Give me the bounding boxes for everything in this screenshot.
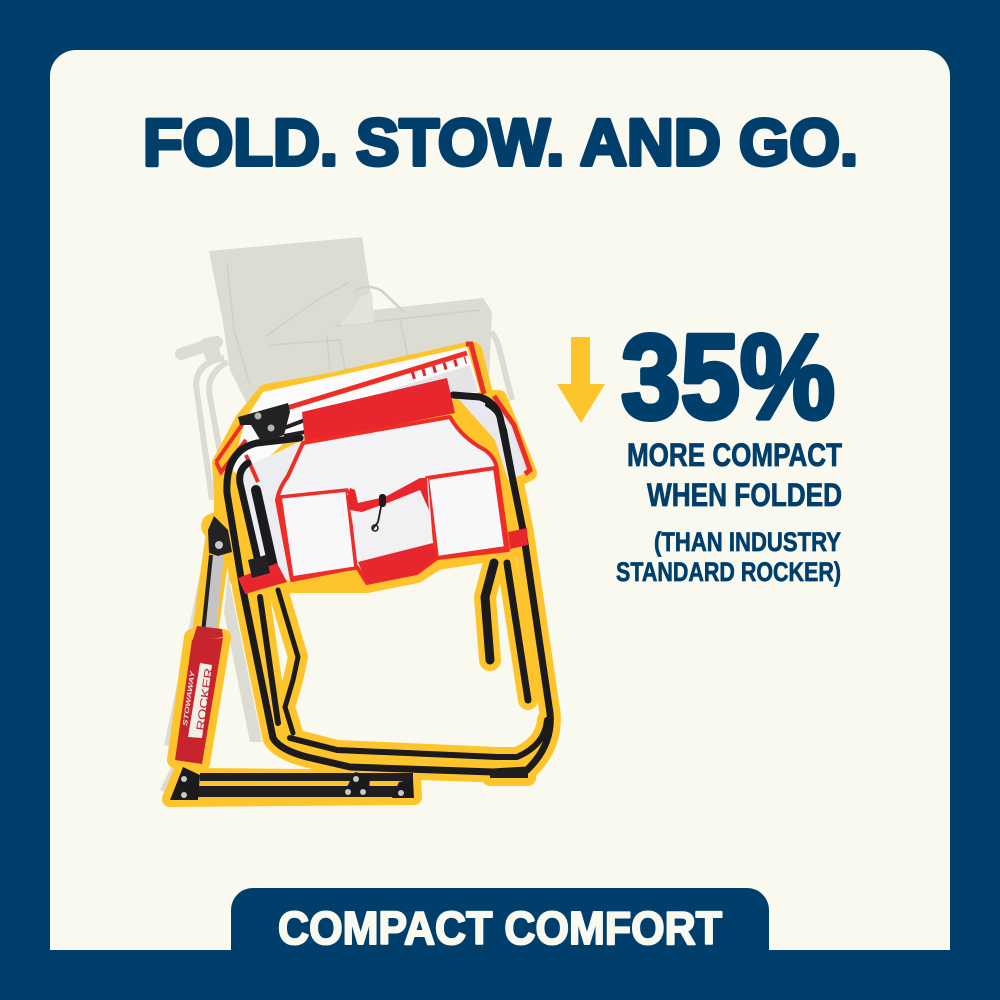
hinge bracket — [238, 403, 305, 443]
left pocket — [280, 490, 356, 578]
white seat fabric behind bag — [216, 344, 530, 582]
right pocket — [427, 468, 506, 558]
footer label: COMPACT COMFORT — [278, 902, 722, 954]
footer tab — [231, 888, 769, 954]
text block: when folded: WHEN FOLDED — [647, 477, 842, 513]
red padded band — [302, 378, 455, 443]
piston — [175, 516, 232, 764]
text block: than industry: (THAN INDUSTRY — [654, 527, 841, 557]
icon: down arrow — [557, 337, 605, 423]
yellow highlight outline — [170, 350, 550, 799]
drawcord — [372, 497, 383, 530]
red straps — [238, 528, 528, 594]
text block: standard rocker: STANDARD ROCKER) — [616, 557, 841, 587]
title: FOLD. STOW. AND GO. — [143, 105, 858, 179]
text block: more compact: MORE COMPACT — [627, 437, 842, 473]
ghosted unfolded chair — [160, 237, 512, 795]
black tube frame — [227, 395, 550, 772]
chair illustration — [160, 237, 550, 800]
piston sublabel: STOWAWAY — [182, 670, 197, 726]
organizer bag — [277, 417, 508, 584]
middle pocket — [347, 478, 433, 562]
big number: 35% — [621, 310, 835, 444]
piston label: ROCKER — [195, 667, 216, 731]
black clamp — [248, 555, 270, 578]
base rails — [170, 767, 528, 800]
